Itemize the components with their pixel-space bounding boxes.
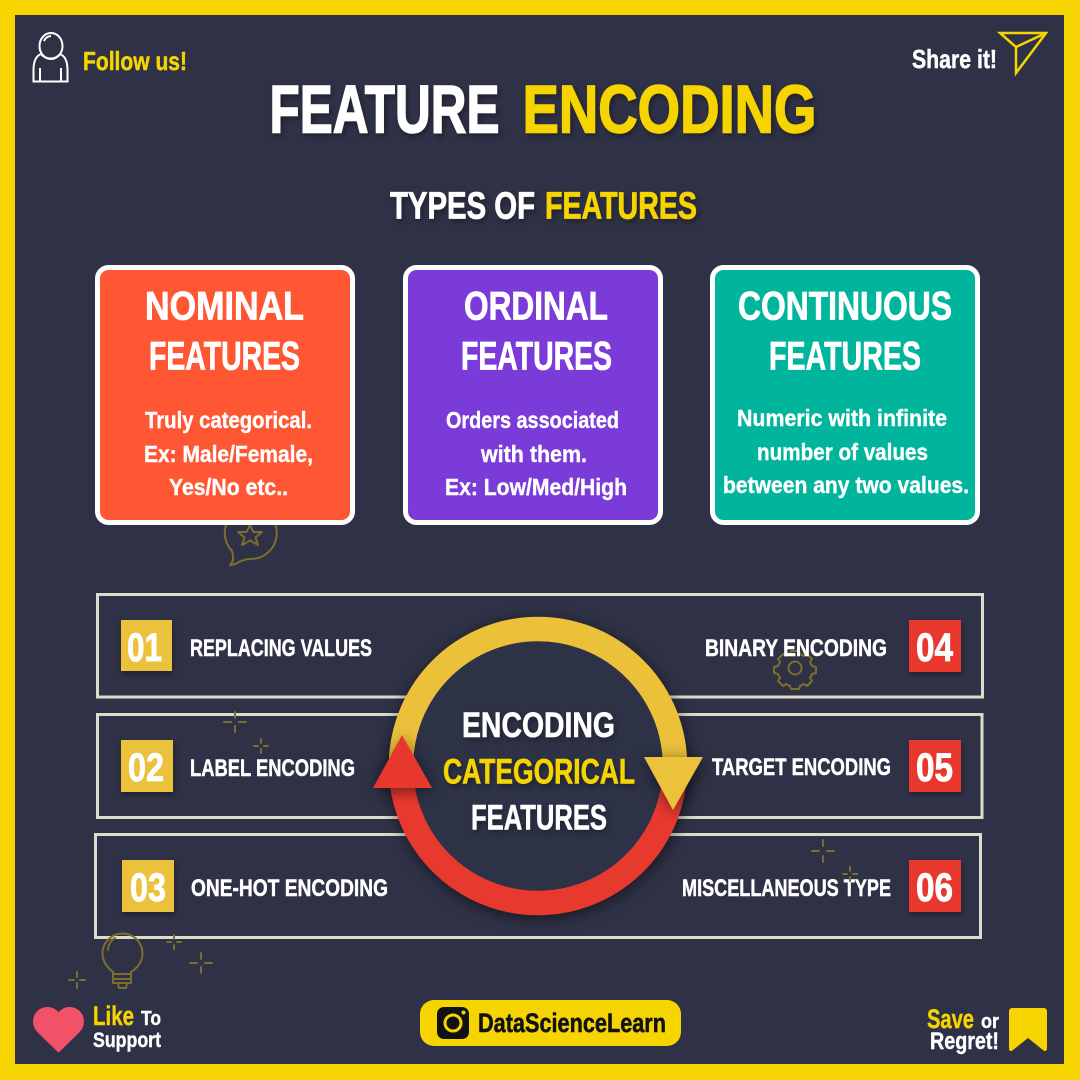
nominal description: Ex: Male/Female,	[144, 441, 313, 467]
save or regret label: or	[981, 1011, 999, 1033]
instagram handle pill	[420, 1000, 681, 1046]
continuous description: number of values	[757, 439, 928, 465]
decorative sparkles	[69, 712, 857, 988]
icon: paper plane	[1000, 33, 1046, 73]
continuous description: between any two values.	[723, 472, 969, 498]
item 01: replacing values	[121, 620, 372, 671]
item 04: binary encoding: 04	[916, 626, 954, 670]
nominal heading	[145, 285, 304, 379]
icon: bookmark	[1009, 1008, 1047, 1051]
icon: heart	[34, 1007, 84, 1052]
item 02: label encoding: 02	[128, 746, 164, 790]
title: ENCODING	[522, 72, 816, 148]
like to support label: Like	[93, 1001, 134, 1031]
panel: ordinal features	[406, 268, 660, 522]
share it label: Share it!	[912, 44, 997, 74]
like to support label: To	[141, 1008, 161, 1030]
item 03: one-hot encoding: ONE-HOT ENCODING	[191, 875, 388, 902]
item 04: binary encoding: BINARY ENCODING	[705, 635, 887, 662]
ordinal description	[445, 407, 627, 500]
icon: gear	[774, 651, 816, 689]
nominal description	[144, 407, 313, 500]
item 02: label encoding	[121, 740, 355, 792]
save or regret label: Regret!	[930, 1028, 999, 1055]
title	[270, 72, 816, 148]
icon: speech bubble with star	[225, 507, 277, 565]
nominal description: Yes/No etc..	[169, 474, 288, 500]
continuous description	[723, 405, 969, 498]
save or regret label: Save	[927, 1004, 974, 1034]
item 04: binary encoding	[705, 620, 961, 672]
like to support label	[93, 1001, 161, 1052]
continuous description: Numeric with infinite	[737, 405, 947, 431]
save or regret label	[927, 1004, 999, 1055]
nominal heading: FEATURES	[149, 335, 300, 379]
row frame: row 1	[98, 594, 982, 697]
item 02: label encoding: LABEL ENCODING	[190, 755, 355, 782]
item 03: one-hot encoding: 03	[130, 866, 166, 910]
item 06: miscellaneous type: MISCELLANEOUS TYPE	[682, 875, 891, 902]
title: FEATURE	[270, 72, 500, 148]
item 01: replacing values: REPLACING VALUES	[190, 635, 372, 662]
ordinal heading: FEATURES	[461, 335, 612, 379]
item 03: one-hot encoding	[122, 860, 388, 912]
ordinal description: Orders associated	[446, 407, 619, 433]
like to support label: Support	[93, 1029, 161, 1052]
nominal heading: NOMINAL	[145, 285, 304, 329]
ordinal description: Ex: Low/Med/High	[445, 474, 627, 500]
ring centre text: FEATURES	[471, 798, 607, 838]
row frame: row 3	[96, 834, 980, 938]
continuous heading: CONTINUOUS	[738, 285, 952, 329]
continuous heading: FEATURES	[769, 335, 921, 379]
row frame: row 2	[98, 714, 982, 818]
instagram handle pill: DataScienceLearn	[478, 1008, 666, 1038]
ordinal heading: ORDINAL	[464, 285, 608, 329]
subtitle: FEATURES	[545, 186, 697, 228]
icon: light bulb	[102, 934, 142, 988]
subtitle: TYPES OF	[390, 186, 535, 228]
item 05: target encoding: 05	[916, 746, 953, 790]
ring centre text: CATEGORICAL	[443, 752, 635, 792]
item 05: target encoding: TARGET ENCODING	[712, 754, 891, 781]
ring centre text	[443, 706, 635, 838]
item 01: replacing values: 01	[127, 626, 162, 670]
ordinal heading	[461, 285, 612, 379]
nominal description: Truly categorical.	[145, 407, 312, 433]
panel: nominal features	[98, 268, 352, 522]
central ring with arrows	[373, 617, 703, 915]
follow us label: Follow us!	[83, 46, 187, 76]
panel: continuous features	[712, 268, 978, 522]
subtitle	[390, 186, 697, 228]
ordinal description: with them.	[480, 441, 587, 467]
ring centre text: ENCODING	[462, 706, 615, 745]
item 06: miscellaneous type	[682, 860, 961, 912]
icon: person	[34, 33, 68, 82]
item 06: miscellaneous type: 06	[916, 866, 953, 910]
item 05: target encoding	[712, 740, 961, 792]
continuous heading	[738, 285, 952, 379]
icon: instagram	[437, 1007, 469, 1039]
